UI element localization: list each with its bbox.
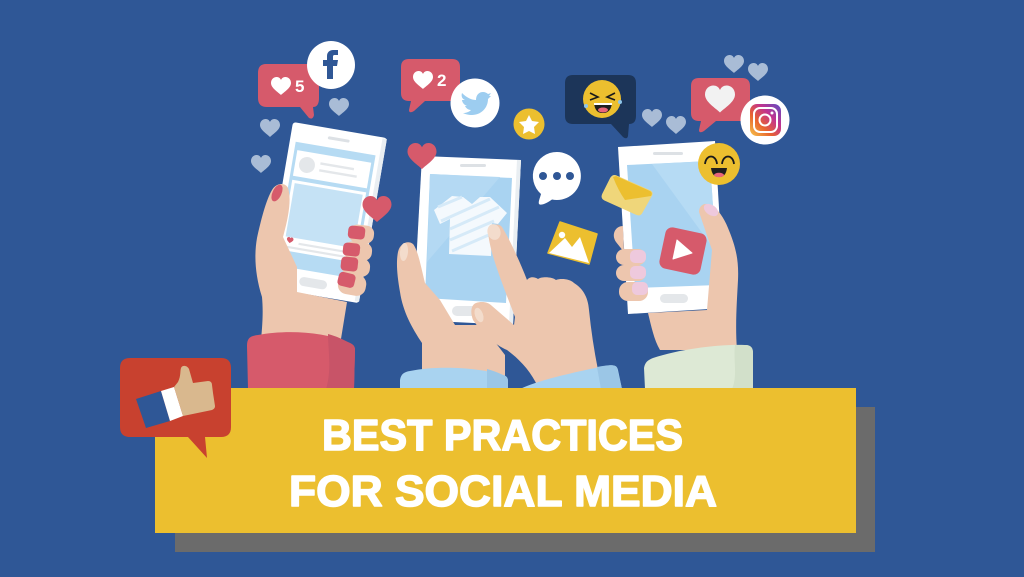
banner shadow (175, 407, 875, 552)
twitter like bubble: 2 (437, 71, 446, 90)
icon: facebook (307, 41, 355, 89)
illustration: left-centre hand (397, 242, 505, 376)
post image card (280, 180, 366, 262)
facebook like bubble: 5 (295, 77, 304, 96)
phone: social feed (265, 122, 387, 303)
left hand fingers with red nails (269, 183, 375, 297)
twitter like bubble (401, 59, 460, 112)
icon: chat bubble (533, 152, 581, 205)
icon: instagram (740, 96, 790, 144)
title text (289, 411, 717, 516)
heart on left phone (362, 196, 392, 222)
red heart above shop phone (408, 143, 436, 169)
laughing emoji bubble (565, 75, 636, 138)
t-shirt (434, 196, 507, 256)
illustration: right hand palm and thumb over phone (648, 201, 738, 350)
phone: shop (413, 156, 521, 325)
illustration: left hand sleeve (247, 332, 355, 389)
icon: picture (548, 222, 597, 264)
light hearts (251, 55, 768, 173)
illustration: pointing hand (471, 223, 598, 385)
right hand fingers with pink nails (614, 226, 648, 301)
icon: star badge (514, 108, 544, 140)
illustration: right sleeve (644, 345, 753, 389)
icon: twitter (450, 78, 500, 128)
smiling emoji (698, 143, 740, 185)
phone: video (618, 141, 725, 314)
illustration: left hand palm over phone (255, 184, 347, 345)
play button (658, 226, 708, 276)
title text: BEST PRACTICES (322, 411, 683, 460)
title banner (155, 388, 856, 533)
thumbs up bubble (120, 358, 231, 458)
facebook like bubble (258, 64, 319, 119)
post header card (293, 150, 371, 188)
icon: envelope (602, 176, 652, 215)
heart bubble (691, 78, 750, 132)
title text: FOR SOCIAL MEDIA (289, 467, 717, 516)
illustration: centre sleeves (400, 365, 622, 389)
